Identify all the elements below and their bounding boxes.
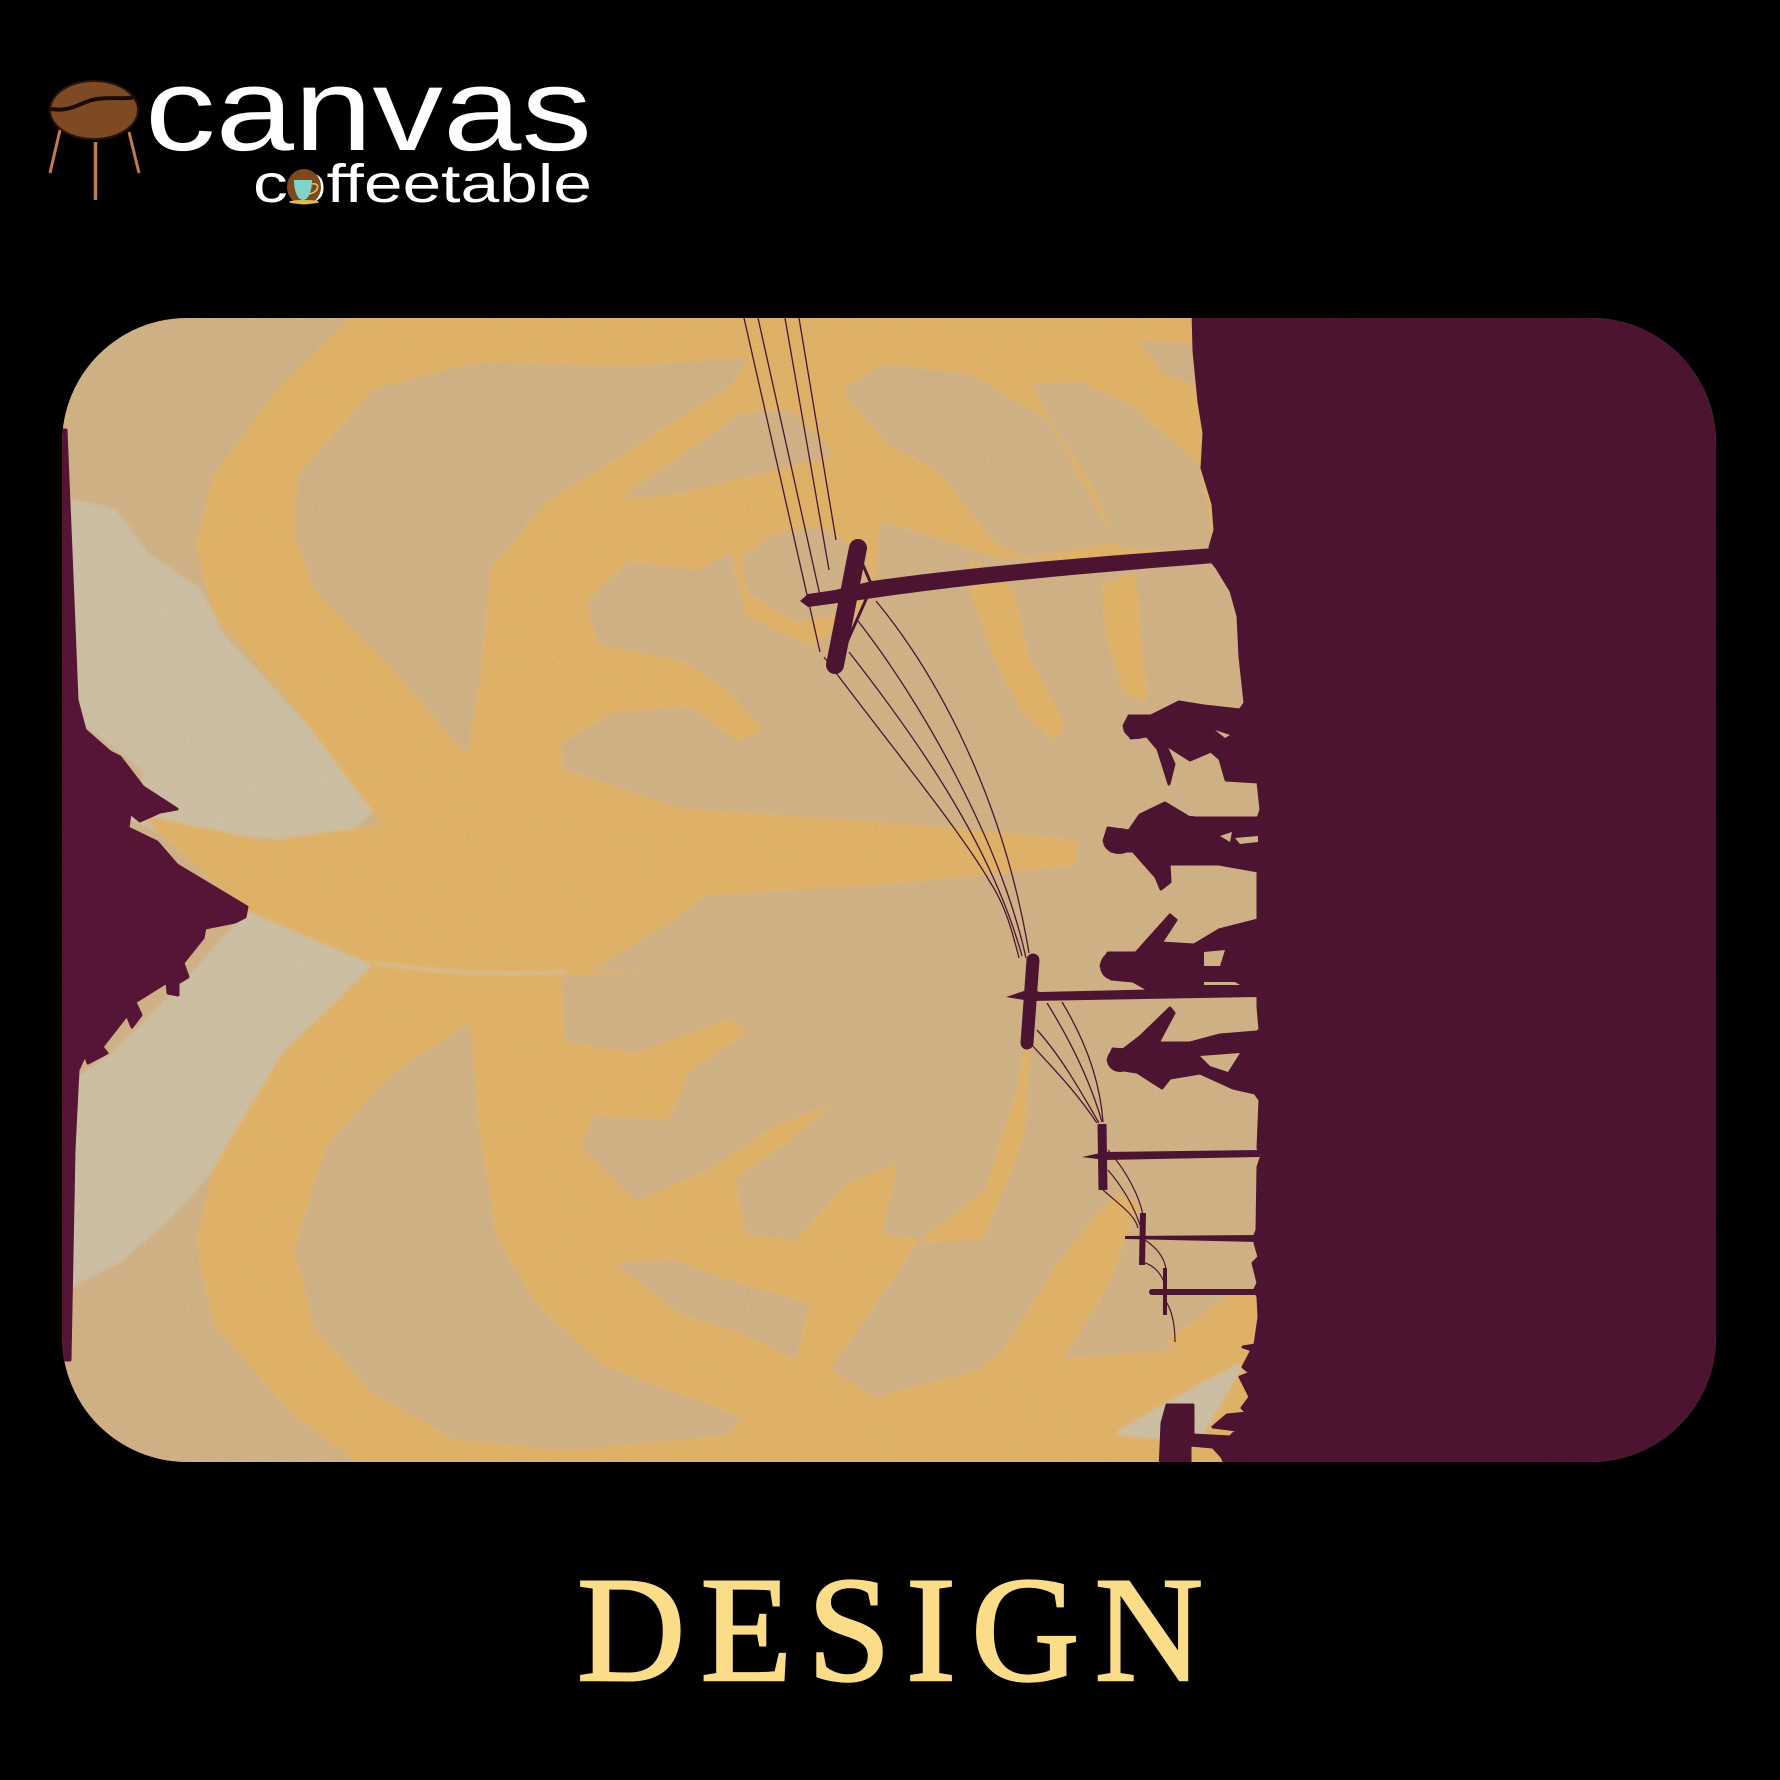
wires upper (744, 318, 1029, 958)
panel: rug (50, 310, 1730, 1476)
tan island upper right (1036, 385, 1211, 549)
artwork: amber root pattern (62, 320, 1271, 1476)
amber stripe one (973, 562, 1061, 737)
amber top shape (199, 320, 1215, 817)
pale fold line (375, 963, 568, 974)
logo wordmark: canvas: canvas (145, 44, 592, 176)
pale left area lower (62, 914, 375, 1288)
wires middle (1030, 1002, 1103, 1123)
wires lower (1103, 1150, 1175, 1342)
pale left area upper (62, 499, 380, 840)
right maroon silhouette with walking figures (1100, 310, 1730, 1470)
utility pole two (1006, 960, 1258, 1043)
icon: coffee bean stool (50, 81, 139, 200)
tan island lower left (297, 1027, 738, 1447)
left maroon silhouette (50, 430, 247, 1360)
amber wedge lower (999, 1198, 1135, 1362)
utility pole four (1125, 1213, 1257, 1265)
tan island left (297, 361, 744, 749)
tan island upper (847, 367, 1111, 555)
tan island centre (744, 529, 868, 619)
tan island lower (622, 1262, 806, 1357)
tan island top corner (1144, 343, 1194, 381)
pale patch bottom right (1120, 1367, 1240, 1439)
amber finger (560, 643, 762, 742)
grain texture (62, 318, 1716, 1462)
icon: coffee cup in the letter o (287, 169, 321, 205)
utility pole one (800, 548, 1215, 665)
utility pole three (1082, 1124, 1260, 1190)
logo wordmark: coffeetable: coffeetable (253, 154, 592, 214)
figure cutouts (1200, 730, 1258, 1072)
tan right region (560, 521, 1048, 786)
utility pole five (1149, 1268, 1259, 1315)
figure heads (1100, 715, 1230, 1072)
tan region lower right (564, 979, 1266, 1394)
caption: DESIGN: DESIGN (577, 1547, 1203, 1713)
logo: canvas coffeetable (50, 44, 592, 214)
amber blob lower (925, 1050, 1027, 1240)
amber bottom shape (199, 967, 1271, 1476)
amber central band (150, 772, 1076, 974)
amber patch near edge (1169, 1296, 1254, 1343)
tan island wedge (628, 412, 830, 496)
rug base (62, 318, 1716, 1462)
amber stripe two (1105, 576, 1144, 698)
